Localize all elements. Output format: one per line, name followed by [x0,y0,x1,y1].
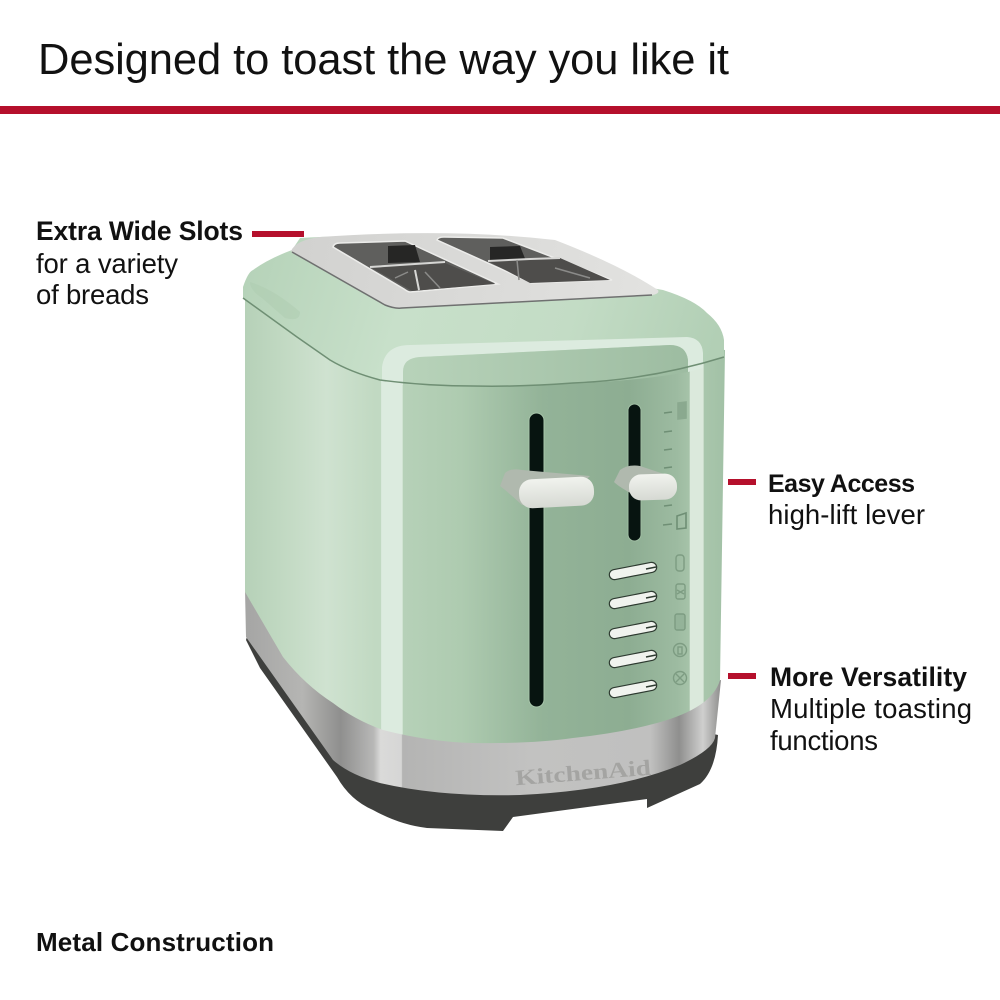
lid front panel [403,345,688,386]
callout: easy access: Easy Access [768,470,915,498]
callout: extra wide slots [36,216,304,310]
callout: easy access: high-lift lever [768,499,925,530]
callout: more versatility: Multiple toasting [770,693,972,724]
browning scale marks [663,402,686,529]
callout: more versatility: functions [770,725,878,756]
lid top [243,237,724,386]
left lever [500,469,595,509]
lid seam [243,298,724,386]
toaster product illustration [243,233,725,831]
title: Designed to toast the way you like it [38,36,729,84]
lid left shade [250,282,300,319]
feature note: metal construction: Metal Construction [36,927,274,957]
function buttons [608,562,658,698]
slot right [437,237,612,283]
callout: more versatility [728,662,972,756]
right lever [614,466,677,501]
steel band [245,590,721,795]
brand mark: KitchenAid [514,755,652,790]
function icons [674,555,686,684]
slot left [333,241,498,292]
callout: more versatility: More Versatility [770,662,967,692]
body [245,290,725,743]
red heading divider [0,106,1000,114]
callout: easy access [728,470,925,530]
top plate [291,233,658,308]
black base [246,625,718,831]
callout: extra wide slots: for a variety [36,248,178,279]
callout: extra wide slots: Extra Wide Slots [36,216,243,246]
right lever slot [628,404,641,541]
left lever slot [529,413,544,707]
callout: extra wide slots: of breads [36,279,149,310]
lid front highlight [382,337,703,385]
plate front edge [292,252,652,308]
